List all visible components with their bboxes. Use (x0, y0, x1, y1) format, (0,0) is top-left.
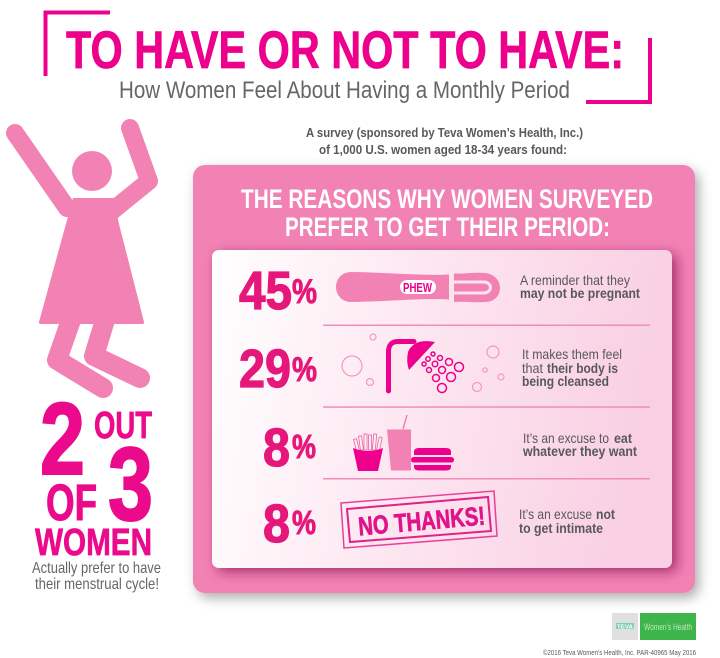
survey intro text (306, 125, 583, 157)
panel background (193, 165, 695, 593)
statistic caption: their menstrual cycle! (35, 576, 159, 593)
statistic: 2 out of 3 women: WOMEN (35, 522, 152, 564)
description: that (522, 360, 543, 376)
subtitle: How Women Feel About Having a Monthly Period (119, 77, 570, 104)
icon: no thanks stamp: NO THANKS! (357, 500, 486, 541)
row: 45 percent (239, 261, 640, 321)
percentage: % (292, 273, 317, 311)
description (519, 506, 615, 536)
row: 29 percent (239, 334, 622, 399)
percentage: % (292, 428, 316, 465)
description (522, 430, 637, 459)
statistic: 2 out of 3 women: 3 (108, 427, 153, 543)
survey intro text: A survey (sponsored by Teva Women’s Health, Inc.) (306, 125, 583, 140)
percentage: 29 (239, 339, 291, 399)
icon: jumping woman (15, 128, 149, 388)
percentage (263, 418, 316, 478)
percentage: % (292, 504, 316, 541)
percentage (263, 494, 316, 554)
description: A reminder that they (520, 272, 630, 288)
description: not (596, 506, 615, 522)
row: 8 percent, intimacy (263, 491, 615, 554)
header with title (46, 12, 650, 104)
icon: pregnancy test: PHEW (403, 281, 432, 295)
percentage: % (292, 351, 317, 389)
white card (212, 250, 672, 568)
panel: reasons (193, 165, 695, 593)
description: whatever they want (522, 443, 637, 459)
description: It’s an excuse to (523, 430, 609, 446)
percentage: 45 (239, 261, 292, 321)
logo: Teva Women's Health (612, 613, 696, 640)
bracket: top left (46, 12, 110, 76)
statistic: 2 out of 3 women (35, 382, 153, 564)
row: 8 percent, eat (263, 415, 637, 478)
icon: no thanks stamp (341, 491, 497, 548)
percentage: 8 (263, 418, 290, 478)
statistic: 2 out of 3 women: 2 (40, 382, 85, 496)
description (522, 346, 622, 389)
panel heading (241, 184, 653, 242)
percentage: 8 (263, 494, 290, 554)
description (520, 272, 640, 301)
icon: pregnancy test (336, 272, 500, 302)
statistic: 2 out of 3 women: OUT (94, 405, 152, 447)
description: may not be pregnant (520, 285, 640, 301)
logo: Teva Women's Health: TEVA (617, 624, 633, 630)
description: their body is (547, 360, 618, 376)
statistic caption (32, 560, 161, 593)
statistic caption: Actually prefer to have (32, 560, 161, 577)
icon: shower (342, 334, 504, 392)
panel heading: PREFER TO GET THEIR PERIOD: (285, 212, 610, 242)
description: to get intimate (519, 520, 603, 536)
description: eat (614, 430, 632, 446)
bracket: bottom right (586, 38, 650, 102)
description: It makes them feel (522, 346, 622, 362)
icon: fast food (353, 415, 454, 471)
description: being cleansed (522, 373, 609, 389)
statistic: 2 out of 3 women: OF (46, 474, 97, 531)
logo: Teva Women's Health: Women’s Health (644, 622, 692, 632)
survey intro text: of 1,000 U.S. women aged 18-34 years found: (319, 142, 567, 157)
description: It’s an excuse (519, 506, 592, 522)
